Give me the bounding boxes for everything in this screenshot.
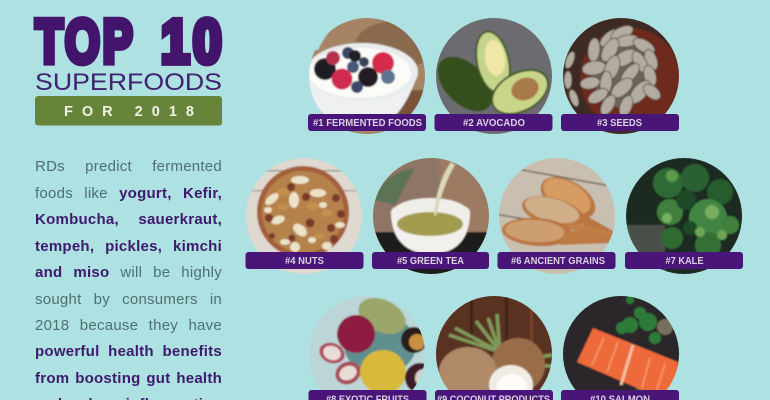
label: #2 avocado: #2 AVOCADO (463, 117, 525, 129)
panel: #8 exotic fruits (308, 296, 426, 400)
title block (35, 7, 225, 125)
panel: #9 coconut products (432, 292, 557, 400)
label: #5 green tea: #5 GREEN TEA (397, 255, 464, 267)
photo: salmon fillet on slate with parsley (563, 296, 679, 390)
panel: #1 fermented foods (308, 18, 426, 134)
title: TOP 10 (36, 7, 225, 76)
subtitle: SUPERFOODS: SUPERFOODS (35, 69, 222, 96)
photo: wooden spoons of grains (499, 158, 615, 274)
panel: #4 nuts (245, 155, 365, 277)
banner: FOR 2018: FOR 2018 (64, 104, 194, 120)
panel: #6 ancient grains (498, 158, 616, 274)
label: #4 nuts: #4 NUTS (285, 255, 324, 267)
photo: sunflower seeds in a dark dish (563, 18, 679, 134)
title: TOP 10: 10 (161, 7, 225, 76)
text block: fermented foods description: and miso will be highly (35, 264, 222, 281)
text block: fermented foods description: powerful health benefits (35, 343, 222, 360)
text block: fermented foods description: Kombucha, sauerkraut, (35, 211, 222, 228)
label: #3 seeds: #3 SEEDS (597, 117, 642, 129)
label: #6 ancient grains: #6 ANCIENT GRAINS (511, 255, 605, 267)
label: #7 kale: #7 KALE (666, 255, 704, 267)
panel: #3 seeds (561, 18, 679, 134)
panel: #10 salmon (560, 292, 685, 400)
photo: coconuts on dark wood (436, 296, 552, 390)
panel: #7 kale (625, 155, 745, 277)
text block: fermented foods description (35, 158, 222, 400)
photo: wooden bowl of mixed nuts (245, 155, 365, 277)
banner: FOR 2018 (35, 96, 222, 126)
photo: avocado halves on slate (436, 18, 552, 134)
text block: fermented foods description: sought by consumers in (35, 291, 222, 308)
text block: fermented foods description: RDs predict fermented (35, 158, 222, 175)
text block: fermented foods description: tempeh, pickles, kimchi (35, 238, 222, 255)
title: TOP 10: TOP (36, 8, 136, 76)
text block: fermented foods description: from boosting gut health (35, 370, 222, 387)
text block: fermented foods description: foods like yogurt, Kefir, (35, 185, 222, 202)
photo: yogurt bowl with berries (309, 18, 425, 134)
photo: plate of exotic fruits (309, 296, 425, 390)
photo: tea poured into a white cup (373, 158, 489, 274)
panel: #2 avocado (434, 18, 552, 134)
text block: fermented foods description: 2018 because they have (35, 317, 222, 334)
photo: green kale leaves (625, 155, 745, 277)
panel: #5 green tea (372, 158, 489, 274)
label: #1 fermented foods: #1 FERMENTED FOODS (313, 117, 422, 129)
